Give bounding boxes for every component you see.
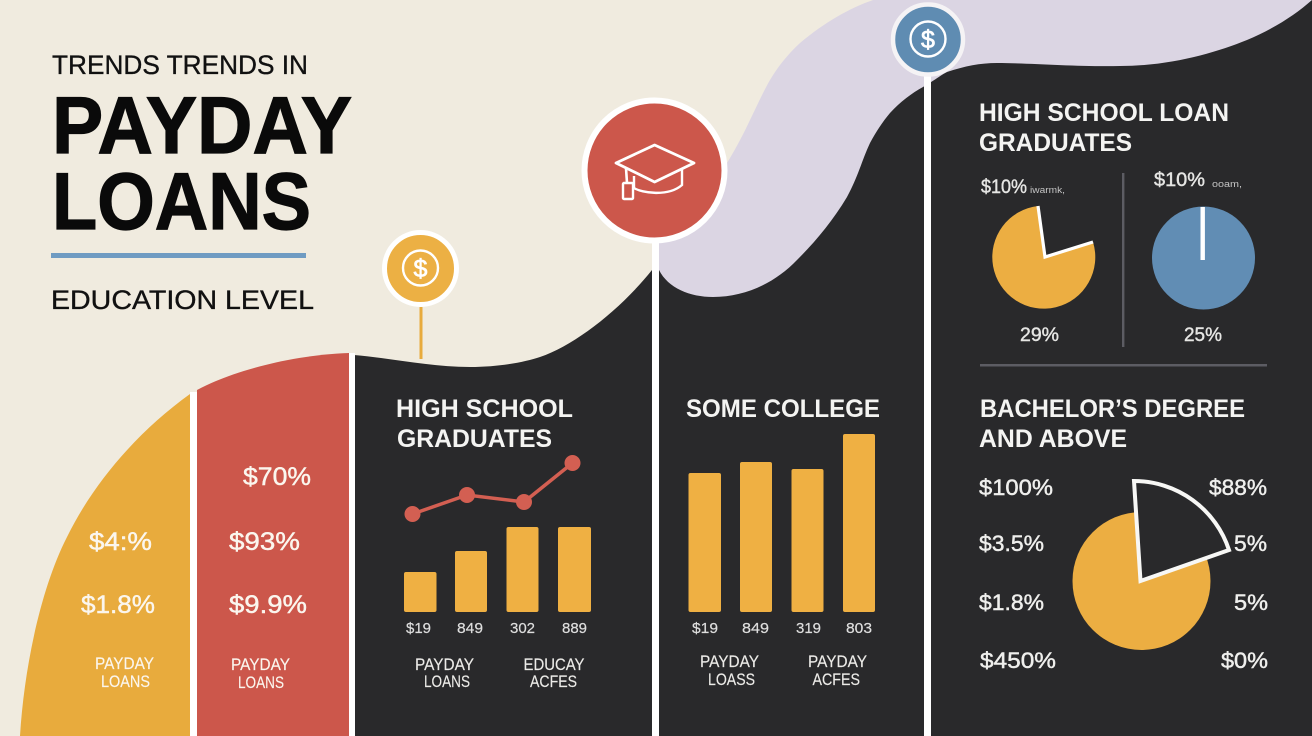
line chart [404, 455, 580, 522]
pie percentages: 25% [1184, 325, 1222, 346]
heading: SOME COLLEGE [686, 395, 880, 423]
chart: yellow pie [992, 206, 1095, 309]
category labels: PAYDAY [415, 655, 474, 674]
subtitle: EDUCATION LEVEL [51, 285, 314, 315]
category labels: EDUCAY [524, 655, 584, 674]
title line one: PAYDAY [52, 81, 352, 171]
panel: bachelor's degree and above [979, 395, 1268, 673]
bar value labels: 849 [457, 620, 483, 637]
category labels: PAYDAY [808, 652, 867, 671]
heading: HIGH SCHOOL LOAN [979, 99, 1229, 127]
bar chart [404, 527, 591, 612]
bar chart [688, 434, 875, 612]
panel: yellow column: LOANS [101, 672, 150, 691]
chart: blue pie [1152, 206, 1255, 310]
right pie label: ooam, [1212, 179, 1242, 189]
left values: $3.5% [979, 531, 1044, 556]
left pie label: $10% [981, 177, 1027, 198]
right pie label: $10% [1154, 170, 1205, 191]
icon: red graduation cap pin [584, 100, 724, 240]
bar value labels: 889 [562, 620, 587, 637]
chart: exploded pie [1072, 481, 1229, 650]
title rule [51, 253, 306, 258]
panel: high school graduates [396, 395, 591, 691]
right values: 5% [1234, 590, 1268, 615]
category labels: LOANS [424, 672, 470, 691]
bar value labels: 849 [742, 620, 769, 637]
pie percentages [1020, 325, 1222, 346]
category labels: ACFES [812, 670, 860, 689]
panel: red column: $9.9% [229, 591, 307, 619]
category labels [415, 655, 584, 691]
heading [396, 395, 573, 453]
icon: yellow dollar pin [384, 232, 456, 359]
category labels: PAYDAY [700, 652, 759, 671]
panel: yellow column [20, 394, 190, 736]
bar value labels: $19 [406, 620, 431, 637]
right values [1209, 475, 1268, 673]
bar value labels: 319 [796, 620, 821, 637]
panel: red column [197, 353, 349, 736]
pie percentages: 29% [1020, 325, 1059, 346]
panel: high school loan graduates [979, 99, 1267, 366]
left values: $100% [979, 475, 1053, 500]
heading: HIGH SCHOOL [396, 395, 573, 423]
right values: $0% [1221, 648, 1268, 673]
title line two: LOANS [52, 157, 311, 247]
heading: BACHELOR’S DEGREE [980, 395, 1245, 423]
panel: red column: $70% [243, 463, 311, 491]
dark curved background [354, 0, 1312, 736]
heading [979, 99, 1229, 157]
category labels: LOASS [708, 670, 755, 689]
heading: GRADUATES [397, 425, 552, 453]
left values [979, 475, 1056, 673]
bar value labels [692, 620, 872, 637]
icon: blue dollar pin: $ [921, 26, 935, 54]
panel: red column: $93% [229, 528, 300, 556]
category labels [700, 652, 867, 689]
panel: yellow column: $4:% [89, 528, 152, 556]
category labels: ACFES [530, 672, 577, 691]
right values: $88% [1209, 475, 1267, 500]
title block [51, 50, 352, 315]
icon: yellow dollar pin: $ [414, 255, 428, 283]
heading: AND ABOVE [979, 425, 1127, 453]
panel: yellow column: $1.8% [81, 591, 155, 619]
panel: yellow column: PAYDAY [95, 654, 154, 673]
panel: some college [686, 395, 880, 689]
bar value labels: 803 [846, 620, 872, 637]
right pie label [1154, 170, 1242, 191]
left values: $450% [980, 648, 1056, 673]
title kicker: TRENDS TRENDS IN [52, 50, 308, 80]
heading [979, 395, 1245, 453]
bar value labels: 302 [510, 620, 535, 637]
icon: blue dollar pin [893, 4, 963, 74]
bar value labels: $19 [692, 620, 718, 637]
right values: 5% [1234, 531, 1267, 556]
bar value labels [406, 620, 587, 637]
left pie label [981, 177, 1065, 198]
left pie label: iwarmk, [1030, 185, 1065, 195]
left values: $1.8% [979, 590, 1044, 615]
panel: red column: PAYDAY [231, 655, 290, 674]
panel: red column: LOANS [238, 673, 284, 692]
heading: GRADUATES [979, 129, 1132, 157]
